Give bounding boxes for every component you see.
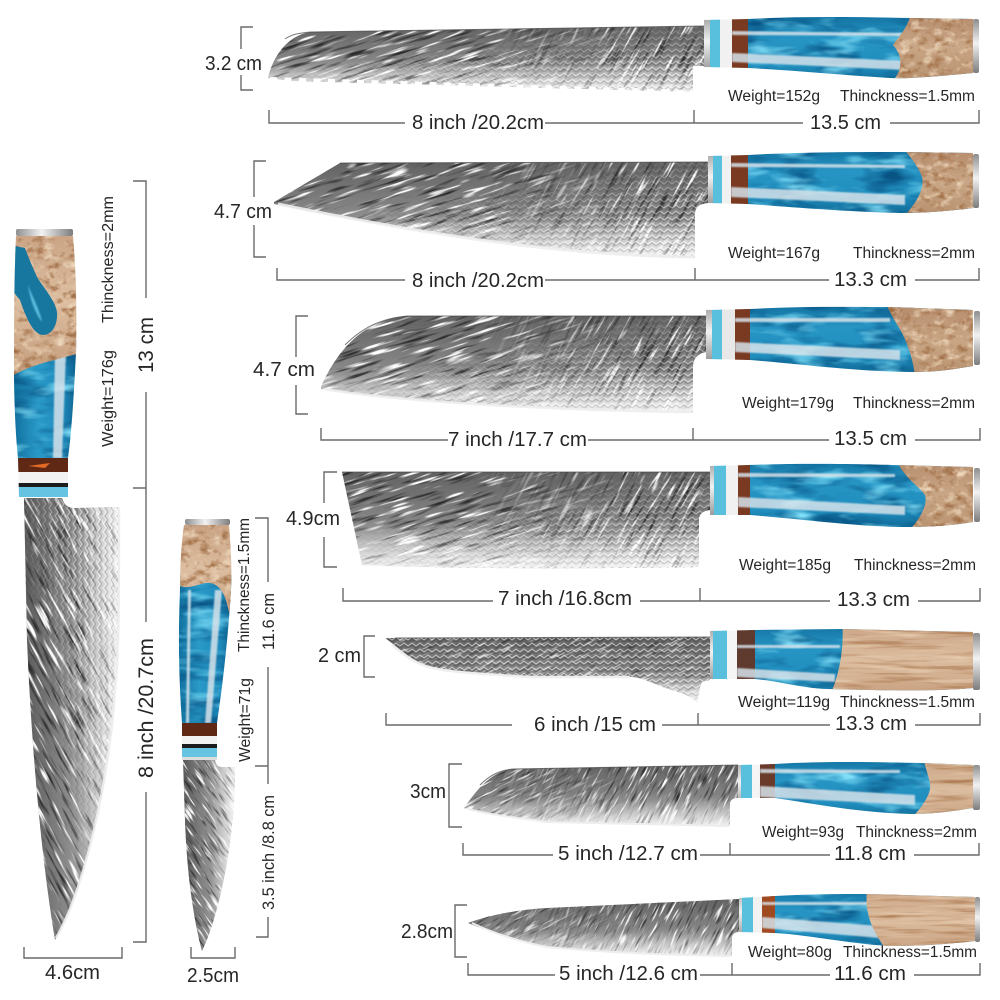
dimension: blade width [318,636,375,677]
handle: santoku [706,306,980,372]
dimension: blade and handle length: 13.3 cm [834,269,907,291]
handle: utility knife [739,894,980,946]
dimension: blade width [24,947,122,984]
label: weight and thickness: Thinckness=2mm [853,245,975,262]
dimension: blade width [286,472,340,567]
blade: bread knife [268,26,704,93]
dimension: overall length: 8 inch /20.7cm [135,638,158,778]
dimension: blade and handle length: 5 inch /12.7 cm [558,843,698,865]
dimension: blade width: 3cm [410,781,446,803]
dimension: blade and handle length: 8 inch /20.2cm [412,112,544,134]
label: weight and thickness: Thinckness=2mm [856,824,977,841]
dimension: blade width: 2.8cm [401,921,453,943]
dimension: blade and handle length: 8 inch /20.2cm [412,270,544,292]
dimension: blade width: 2 cm [318,645,361,667]
blade: santoku [321,316,706,413]
dimension: blade and handle length: 13.5 cm [810,112,881,134]
dimension: blade width: 2.5cm [187,965,239,987]
label: weight and thickness: Weight=152g [728,88,820,105]
dimension: blade and handle length: 13.3 cm [837,589,910,611]
dimension: blade and handle length: 11.8 cm [834,843,906,865]
dimension: blade and handle length [321,428,980,451]
label: weight and thickness [728,245,975,262]
blade: chef knife [24,498,120,940]
dimension: blade width: 4.7 cm [253,359,315,381]
dimension: blade and handle length: 5 inch /12.6 cm [559,963,698,985]
dimension: blade and handle length: 11.6 cm [834,963,906,985]
dimension: overall length: 11.6 cm [259,593,278,650]
blade: nakiri [342,472,710,568]
blade: utility knife [468,899,739,957]
handle: bread knife [704,17,979,78]
dimension: blade width [187,947,239,987]
label: weight and thickness [100,196,117,447]
label: weight and thickness [236,518,254,762]
label: weight and thickness: Thinckness=1.5mm [840,694,975,711]
label: weight and thickness: Thinckness=2mm [100,196,117,323]
label: weight and thickness: Thinckness=2mm [854,557,976,574]
knife: 7 inch santoku [253,300,985,451]
dimension: blade and handle length [269,110,979,134]
label: weight and thickness: Weight=179g [742,395,834,412]
handle: boning knife [710,629,980,690]
blade: boning knife [385,637,710,702]
dimension: blade width [410,764,462,827]
handle: chef knife [14,229,76,497]
label: weight and thickness: Weight=93g [762,824,844,841]
knife: 8 inch kiritsuke [214,145,985,292]
label: weight and thickness [762,824,977,841]
knife: 8 inch bread knife [206,17,980,129]
dimension: blade width [401,905,467,957]
dimension: blade width [214,161,272,257]
dimension: overall length [133,181,158,942]
blade: kiritsuke [274,162,708,258]
label: weight and thickness [728,88,975,105]
knife: 7 inch nakiri [286,455,985,611]
dimension: blade width: 3.2 cm [205,53,262,75]
label: weight and thickness: Thinckness=2mm [853,395,975,412]
label: weight and thickness: Thinckness=1.5mm [236,518,253,652]
dimension: overall length [255,518,278,937]
label: weight and thickness: Weight=80g [748,944,832,961]
label: weight and thickness [739,557,976,574]
knife: 6 inch boning knife [319,629,981,731]
dimension: blade width: 4.9cm [286,508,340,530]
dimension: blade and handle length: 6 inch /15 cm [534,714,656,736]
label: weight and thickness: Weight=119g [738,694,830,711]
dimension: blade and handle length: 13.5 cm [834,428,907,450]
handle: utility santoku [738,762,980,814]
label: weight and thickness [742,395,975,412]
label: weight and thickness: Weight=185g [739,557,831,574]
dimension: blade width [205,27,262,90]
label: weight and thickness [748,944,977,961]
dimension: blade and handle length [277,268,979,292]
dimension: blade and handle length: 7 inch /16.8cm [498,588,632,610]
dimension: blade and handle length: 13.3 cm [835,713,907,735]
knife: vertical 3.5 inch paring knife [175,518,278,987]
dimension: blade and handle length [343,588,980,611]
label: weight and thickness [738,694,975,711]
knife: vertical 8 inch chef knife [10,181,158,984]
knife: 5 inch utility knife [402,894,981,980]
blade: utility santoku [464,765,738,827]
dimension: overall length: 13 cm [135,317,158,373]
label: weight and thickness: Thinckness=1.5mm [843,944,977,961]
blade: paring knife [183,760,235,951]
dimension: blade and handle length [386,713,980,736]
dimension: blade width: 4.6cm [45,962,100,984]
handle: nakiri [710,464,980,527]
dimension: overall length: 3.5 inch /8.8 cm [259,795,278,910]
dimension: blade width: 4.7 cm [214,201,272,223]
handle: paring knife [178,519,232,760]
label: weight and thickness: Weight=176g [100,350,117,447]
dimension: blade width [253,316,315,414]
handle: kiritsuke [708,152,979,213]
label: weight and thickness: Weight=167g [728,245,820,262]
knife: 5 inch utility santoku [410,762,980,860]
dimension: blade and handle length: 7 inch /17.7 cm [448,429,587,451]
dimension: blade and handle length [463,843,979,865]
dimension: blade and handle length [468,963,980,985]
label: weight and thickness: Weight=71g [237,678,254,762]
label: weight and thickness: Thinckness=1.5mm [840,88,975,105]
